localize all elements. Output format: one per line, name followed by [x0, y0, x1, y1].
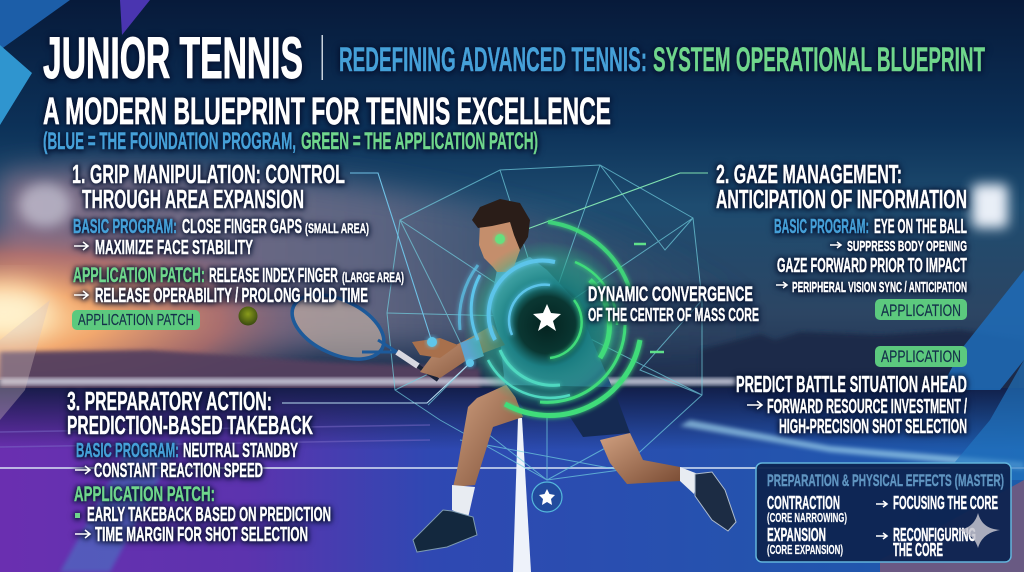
- heading: gaze: 2. GAZE MANAGEMENT:: [716, 159, 902, 189]
- heading: grip: [72, 159, 345, 214]
- core label: DYNAMIC CONVERGENCE: [588, 283, 753, 306]
- core label: OF THE CENTER OF MASS CORE: [588, 305, 759, 325]
- leader line: preparation: [282, 363, 470, 403]
- basic program: grip: BASIC PROGRAM:: [73, 216, 177, 238]
- core energy rings: [459, 222, 640, 415]
- node: tech dashes: [634, 244, 664, 352]
- colour legend: (BLUE = THE FOUNDATION PROGRAM,: [43, 128, 296, 155]
- basic program: preparatory: NEUTRAL STANDBY: [183, 440, 298, 462]
- badge: application 2: APPLICATION: [881, 347, 961, 366]
- panel: preparation and physical effects: [756, 463, 1011, 562]
- heading: preparatory: PREDICTION-BASED TAKEBACK: [67, 410, 313, 440]
- gaze forward text: [776, 255, 967, 296]
- colour legend: GREEN = THE APPLICATION PATCH): [301, 128, 538, 155]
- free hand: [412, 338, 458, 358]
- badge: application 1: [875, 299, 967, 320]
- player: [282, 199, 736, 552]
- row: expansion: THE CORE: [893, 540, 943, 560]
- basic program: preparatory: CONSTANT REACTION SPEED: [94, 460, 263, 482]
- application patch: grip: RELEASE INDEX FINGER: [209, 265, 338, 287]
- tennis ball: [238, 306, 258, 326]
- back sock: [680, 467, 698, 494]
- racket: [282, 282, 438, 380]
- panel: grip manipulation: [72, 159, 404, 307]
- star: core: [533, 304, 561, 331]
- application patch: preparatory: [74, 483, 331, 546]
- application patch: grip: (LARGE AREA): [342, 269, 404, 285]
- subtitle: REDEFINING ADVANCED TENNIS:: [339, 41, 647, 79]
- shirt: [490, 257, 612, 387]
- sock: [452, 485, 475, 518]
- application patch: grip: RELEASE OPERABILITY / PROLONG HOLD TIME: [95, 285, 368, 307]
- wireframe polyhedron around the player: [387, 165, 702, 480]
- hair: [472, 199, 530, 250]
- neck and face: [479, 222, 520, 272]
- application patch: preparatory: APPLICATION PATCH:: [74, 483, 215, 506]
- panel: gaze management: [716, 159, 967, 296]
- basic program: gaze: [774, 216, 967, 255]
- row: contraction: CONTRACTION: [767, 493, 840, 513]
- title divider: [322, 35, 323, 80]
- application patch: preparatory: TIME MARGIN FOR SHOT SELECTION: [95, 524, 308, 546]
- core label: [588, 283, 759, 325]
- node: hand: [427, 337, 437, 347]
- main heading: A MODERN BLUEPRINT FOR TENNIS EXCELLENCE: [43, 91, 611, 133]
- application patch: preparatory: EARLY TAKEBACK BASED ON PREDICTION: [87, 504, 331, 526]
- badge: application 2: [875, 346, 967, 367]
- heading: grip: THROUGH AREA EXPANSION: [82, 184, 304, 214]
- basic program: preparatory: [75, 440, 298, 482]
- heading: gaze: [716, 159, 967, 214]
- panel: preparatory action: [67, 386, 331, 546]
- application patch: grip: APPLICATION PATCH:: [73, 264, 205, 287]
- row: expansion: (CORE EXPANSION): [767, 543, 843, 557]
- wristband: [460, 336, 484, 363]
- node: wrist: [466, 359, 474, 367]
- heading: preparatory: 3. PREPARATORY ACTION:: [67, 386, 272, 416]
- back shoe: [695, 472, 736, 531]
- text: predict battle situation: [736, 371, 967, 438]
- shorts: [505, 383, 630, 437]
- basic program: gaze: BASIC PROGRAM:: [774, 216, 869, 238]
- front leg: [453, 383, 523, 487]
- heading: preparatory: [67, 386, 313, 440]
- row: expansion: EXPANSION: [767, 525, 826, 545]
- star node: base: [532, 482, 562, 512]
- leader line: grip: [350, 173, 432, 342]
- back leg: [600, 433, 680, 484]
- icon: sparkle: [957, 513, 1000, 548]
- badge: application 1: APPLICATION: [881, 301, 961, 320]
- row: expansion: [767, 525, 976, 560]
- row: contraction: (CORE NARROWING): [767, 511, 847, 525]
- basic program: preparatory: BASIC PROGRAM:: [76, 440, 179, 462]
- heading: grip: 1. GRIP MANIPULATION: CONTROL: [72, 159, 345, 189]
- arm: [420, 325, 505, 378]
- basic program: grip: (SMALL AREA): [305, 220, 369, 236]
- badge: application patch: [72, 310, 200, 330]
- basic program: grip: [73, 216, 369, 259]
- basic program: grip: MAXIMIZE FACE STABILITY: [95, 237, 253, 259]
- node: eye: [495, 234, 505, 244]
- title: JUNIOR TENNIS: [43, 26, 303, 91]
- front shoe: [413, 510, 477, 552]
- leader line: gaze: [500, 173, 708, 239]
- row: contraction: [767, 493, 998, 525]
- application patch: grip: [73, 264, 404, 307]
- basic program: grip: CLOSE FINGER GAPS: [182, 216, 302, 238]
- badge: application patch: APPLICATION PATCH: [78, 312, 194, 329]
